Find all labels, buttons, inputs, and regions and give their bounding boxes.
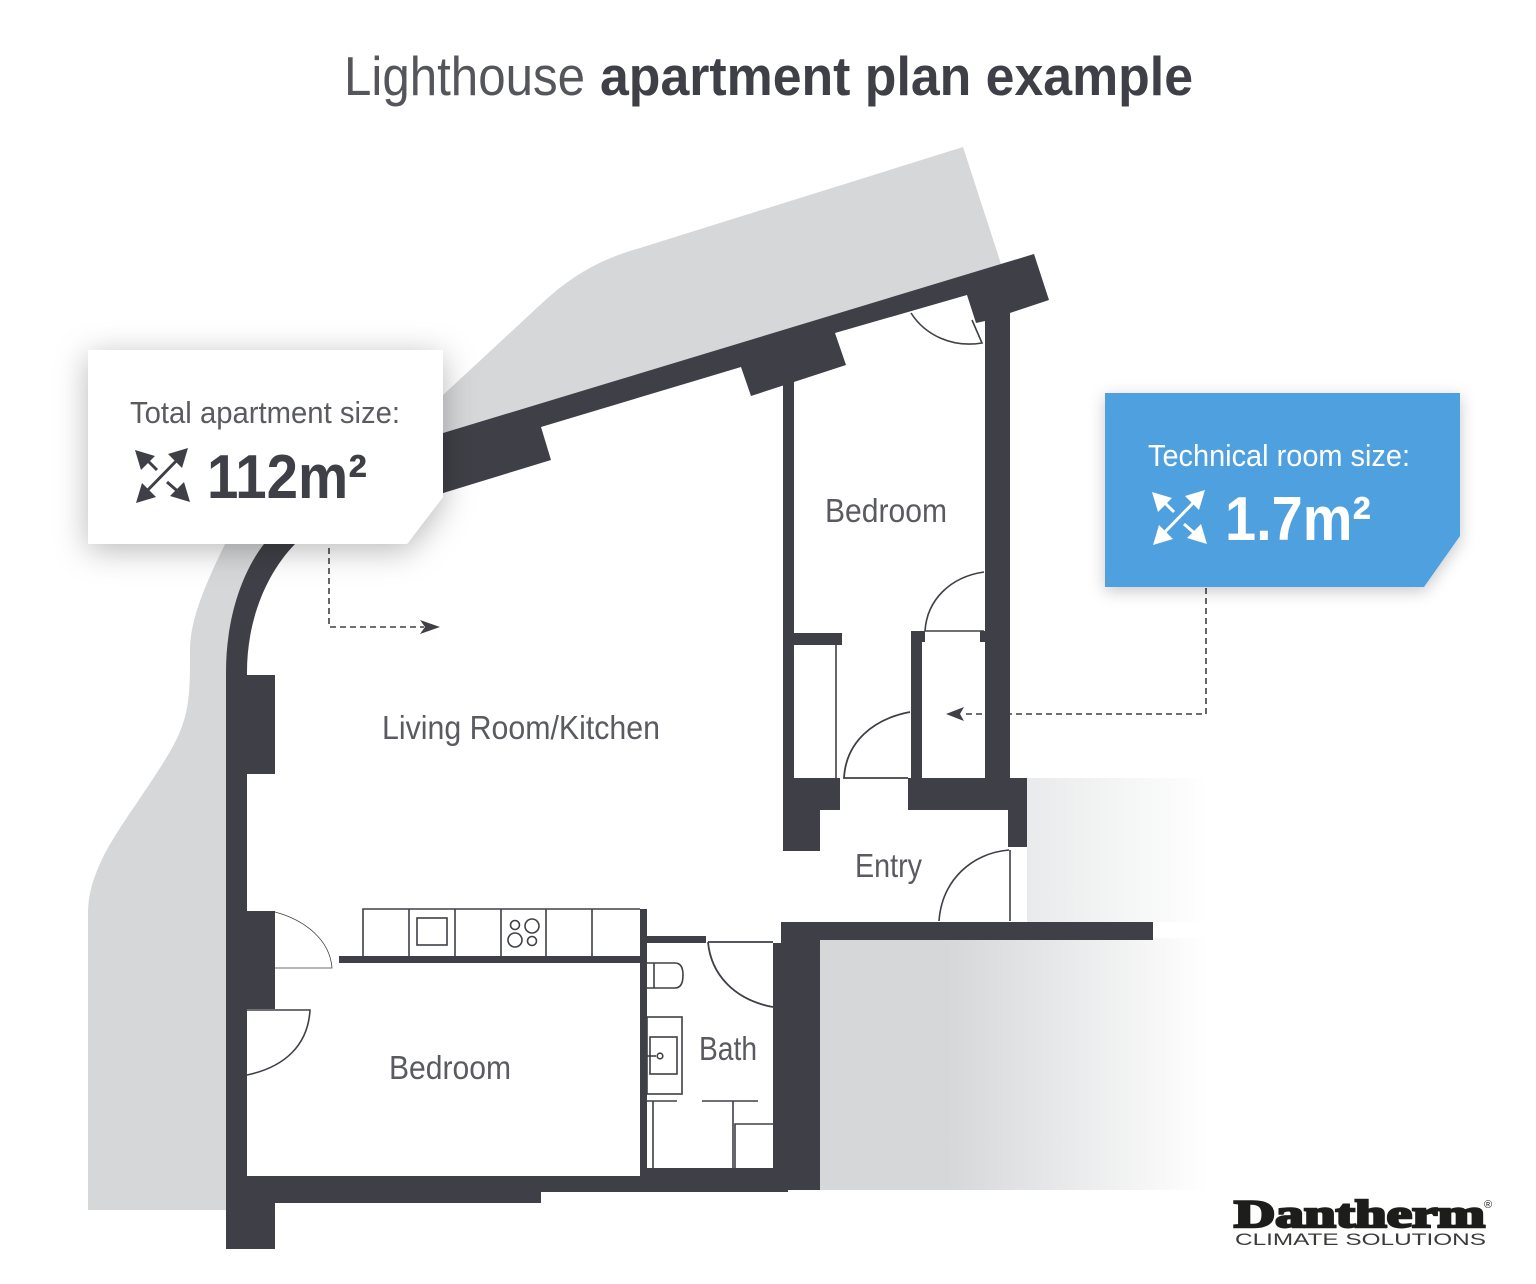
interior floor: [247, 300, 1027, 1176]
door: entry: [939, 850, 1010, 921]
bathroom fixtures: [647, 963, 773, 1168]
room label: bedroom lower: Bedroom: [389, 1049, 511, 1086]
title: apartment plan example: [600, 45, 1193, 107]
closet front line: [835, 645, 837, 778]
grey surroundings: upper-left terrain: [88, 147, 1003, 1210]
kitchen counter: [363, 909, 640, 956]
door: technical room: [925, 572, 984, 631]
wall: top angled wall: [420, 254, 1049, 780]
icon: expand arrows: [1152, 490, 1207, 545]
wall: kitchen counter back: [339, 956, 640, 963]
icon: cooktop: [508, 919, 539, 947]
grey surroundings: upper-right gradient: [1027, 778, 1208, 922]
door: upper bedroom entrance: [911, 313, 982, 344]
icon: toilet: [647, 963, 683, 988]
room label: bath: Bath: [699, 1030, 757, 1067]
callout: total apartment size: Total apartment size:: [130, 395, 400, 430]
title: [344, 45, 1193, 107]
arrow: total apartment size pointer: [329, 548, 440, 634]
doors: [247, 313, 1010, 1075]
room label: living room: Living Room/Kitchen: [382, 709, 660, 746]
wall: bedroom partition with closet: [783, 377, 842, 851]
floor plan walls: [226, 254, 1153, 1249]
logo: Dantherm: [1234, 1193, 1492, 1249]
icon: expand arrows: [135, 448, 190, 503]
door: bath: [708, 942, 773, 1007]
grey surroundings: lower-right gradient: [820, 938, 1208, 1190]
logo: Dantherm: ®: [1484, 1199, 1492, 1211]
wall: bath top stub: [647, 936, 706, 943]
logo: Dantherm: CLIMATE SOLUTIONS: [1235, 1230, 1486, 1249]
room label: bedroom upper: Bedroom: [825, 492, 947, 529]
icon: sink: [647, 1017, 682, 1094]
wall: technical room block: [908, 631, 1027, 847]
door: closet hall: [844, 712, 910, 778]
arrow: technical room pointer: [946, 588, 1206, 721]
room label: entry: Entry: [855, 847, 922, 884]
callout: total apartment size: 112m²: [207, 443, 367, 512]
callout: technical room size: 1.7m²: [1225, 485, 1371, 554]
door: bedroom balcony: [247, 1010, 310, 1075]
title: Lighthouse: [344, 45, 585, 107]
shower and bath partitions: [647, 1101, 773, 1168]
icon: oven: [417, 918, 447, 945]
callout: technical room size: Technical room size:: [1148, 438, 1410, 473]
callout: total apartment size: [88, 350, 443, 544]
logo: Dantherm: Dantherm: [1234, 1193, 1485, 1236]
callout: technical room size: [1105, 393, 1460, 587]
wall: curved and left outer wall: [226, 544, 1153, 1249]
door: living room balcony: [275, 912, 332, 968]
